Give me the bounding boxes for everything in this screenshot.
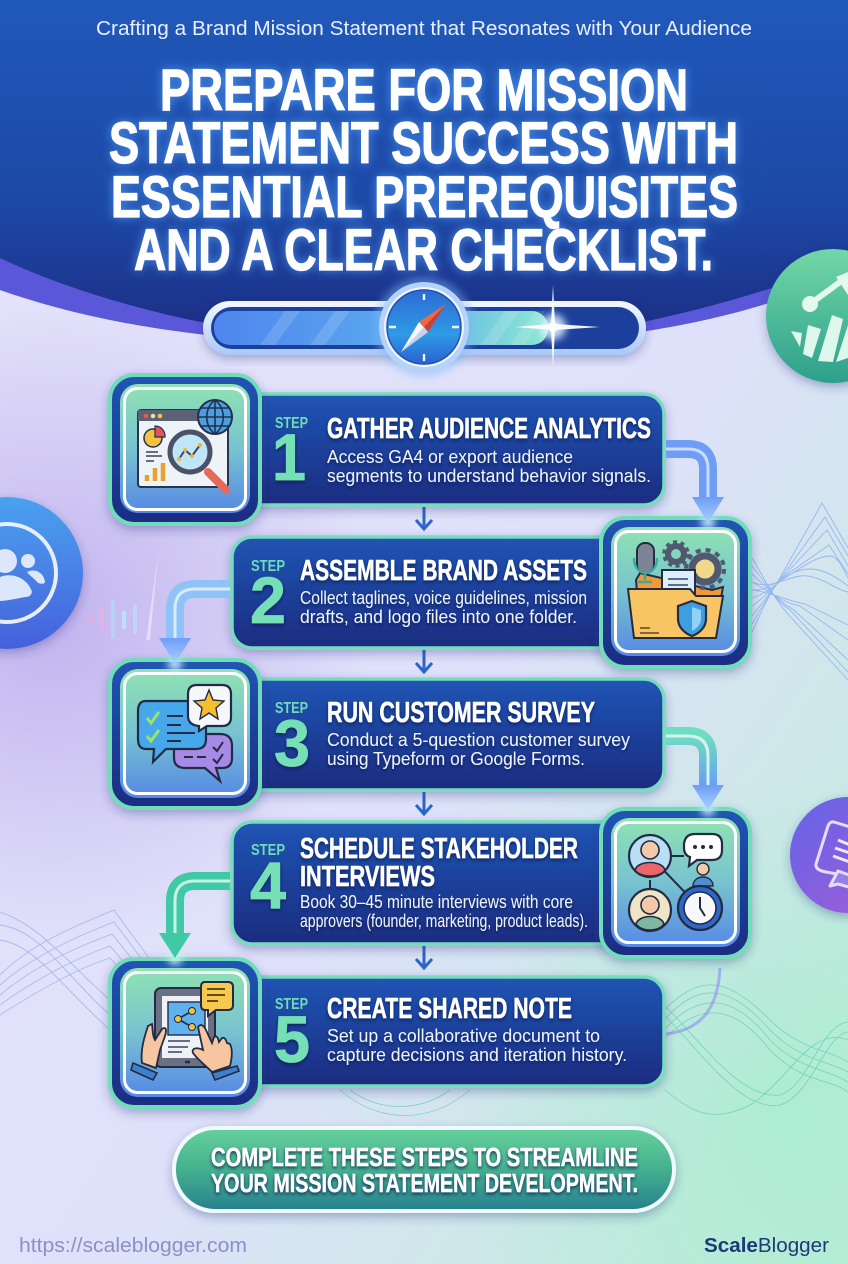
side icon: analytics circle — [766, 249, 848, 383]
call to action text: YOUR MISSION STATEMENT DEVELOPMENT. — [211, 1168, 638, 1198]
footer url: https://scaleblogger.com — [19, 1234, 247, 1257]
description: capture decisions and iteration history. — [327, 1045, 627, 1065]
footer brand: ScaleBlogger — [704, 1234, 829, 1257]
step label: STEP — [251, 842, 285, 859]
description: drafts, and logo files into one folder. — [300, 607, 577, 627]
description — [327, 730, 630, 769]
step title: INTERVIEWS — [300, 861, 435, 893]
arrow: step 2 to step 3 — [159, 589, 230, 671]
description — [300, 588, 587, 627]
arrow: step 4 to step 5 — [159, 881, 230, 965]
decorative wave lines: lower left — [0, 910, 165, 1030]
icon tile: folder — [601, 518, 750, 667]
step 2 — [232, 518, 750, 667]
step title: SCHEDULE STAKEHOLDER — [300, 833, 578, 865]
description — [327, 1026, 627, 1065]
decorative wave lines: upper right — [752, 503, 848, 680]
step title: GATHER AUDIENCE ANALYTICS — [327, 413, 651, 445]
compass — [374, 277, 474, 377]
icon tile: stakeholders — [601, 809, 750, 957]
step 1 — [110, 375, 664, 524]
step 5 — [110, 959, 664, 1107]
step label: STEP — [275, 700, 308, 717]
arrow: down 2 to 3 — [416, 650, 432, 672]
panel — [232, 822, 622, 944]
description: approvers (founder, marketing, product leads). — [300, 911, 588, 931]
panel — [240, 679, 664, 790]
description — [300, 892, 588, 931]
panel — [240, 977, 664, 1086]
step number: 1 — [272, 420, 306, 494]
description: Collect taglines, voice guidelines, mission — [300, 588, 587, 608]
description: Book 30–45 minute interviews with core — [300, 892, 573, 912]
step number: 3 — [274, 706, 310, 780]
step 3 — [110, 660, 664, 808]
step title — [300, 833, 578, 893]
title — [109, 58, 738, 283]
step label: STEP — [251, 558, 285, 575]
icon tile: shared note — [110, 959, 260, 1107]
side icon: people circle — [0, 497, 83, 649]
arrow: down 4 to 5 — [416, 946, 432, 968]
decorative glow arc — [666, 968, 720, 1034]
sparkle — [515, 285, 600, 368]
decorative wave lines: lower right — [340, 985, 848, 1116]
step label: STEP — [275, 996, 308, 1013]
description — [327, 447, 651, 486]
panel — [240, 394, 664, 505]
call to action text — [211, 1142, 638, 1198]
header band — [0, 0, 848, 346]
side icon: document circle — [790, 797, 848, 913]
icon tile: analytics — [110, 375, 260, 524]
step title: CREATE SHARED NOTE — [327, 993, 572, 1025]
step number: 5 — [274, 1002, 310, 1076]
decorative light beam — [146, 555, 158, 640]
step number: 4 — [250, 848, 286, 922]
arrow: down 1 to 2 — [416, 507, 432, 529]
arrow: down 3 to 4 — [416, 792, 432, 814]
step title: RUN CUSTOMER SURVEY — [327, 697, 595, 729]
icon tile: survey chat — [110, 660, 260, 808]
step number: 2 — [250, 563, 286, 637]
decorative sound bars — [92, 602, 135, 637]
description: Set up a collaborative document to — [327, 1026, 600, 1046]
title: PREPARE FOR MISSION — [160, 58, 688, 123]
description: segments to understand behavior signals. — [327, 466, 651, 486]
description: Access GA4 or export audience — [327, 447, 573, 467]
description: Conduct a 5-question customer survey — [327, 730, 630, 750]
call to action text: COMPLETE THESE STEPS TO STREAMLINE — [211, 1142, 638, 1172]
arrow: step 3 to step 4 — [666, 736, 724, 816]
description: using Typeform or Google Forms. — [327, 749, 585, 769]
step label: STEP — [275, 415, 308, 432]
panel — [232, 537, 622, 648]
step 4 — [232, 809, 750, 957]
arrow: step 1 to step 2 — [666, 449, 724, 529]
call to action pill — [174, 1128, 674, 1211]
step title: ASSEMBLE BRAND ASSETS — [300, 555, 587, 587]
subtitle: Crafting a Brand Mission Statement that Resonates with Your Audience — [96, 17, 752, 40]
progress bar with compass — [203, 277, 646, 377]
